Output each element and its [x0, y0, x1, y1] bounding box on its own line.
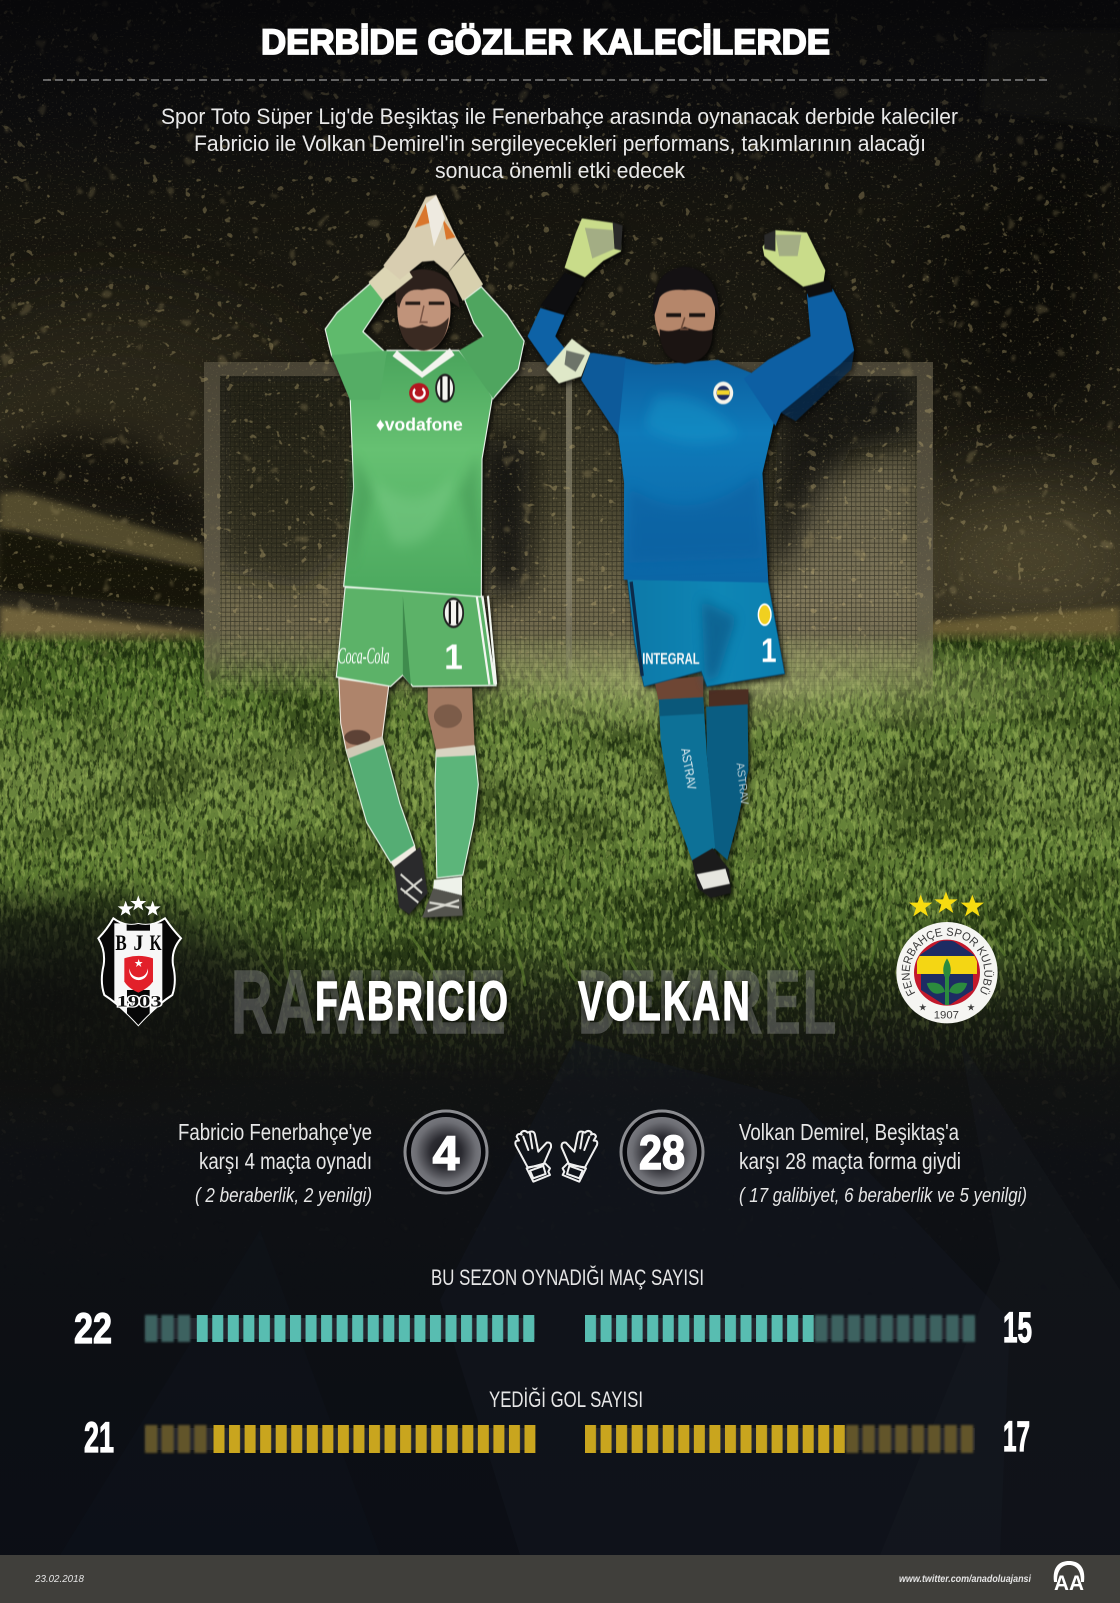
right arm: [744, 289, 854, 426]
red emblem: [124, 956, 153, 993]
goal frame: [204, 362, 933, 702]
crest on jersey: [713, 382, 733, 404]
boots: [394, 847, 428, 914]
stars: [909, 891, 984, 916]
text: Volkan derby record: Volkan Demirel, Beşiktaş'a: [739, 1119, 959, 1145]
value 21: 21: [84, 1414, 114, 1462]
heading: YEDİĞİ GOL SAYISI: [489, 1387, 643, 1412]
text: Fabricio derby record: [178, 1119, 372, 1207]
right cuff: [805, 280, 833, 298]
text: Fabricio derby record: ( 2 beraberlik, 2 yenilgi): [195, 1185, 372, 1207]
right stadium dust glow: [900, 100, 1120, 650]
icon: agency logo: [1054, 1561, 1084, 1595]
value 17: 17: [1003, 1413, 1030, 1461]
footer bar: [0, 1555, 1120, 1603]
ring lettering: FENERBAHÇE SPOR KULÜBÜ: [902, 928, 994, 996]
shield colours: [917, 937, 977, 1007]
crest: Fenerbahçe: 1907: [934, 1010, 959, 1022]
intro paragraph: sonuca önemli etki edecek: [435, 158, 686, 183]
head: [397, 270, 451, 351]
sponsor: vodafone: ♦vodafone: [376, 415, 463, 435]
icon: agency logo: AA: [1054, 1572, 1084, 1595]
player: Fabricio, green goalkeeper kit: [325, 195, 524, 918]
dashed divider: [43, 79, 1050, 81]
intro paragraph: Spor Toto Süper Lig'de Beşiktaş ile Fenerbahçe arasında oynanacak derbide kaleciler: [161, 104, 958, 129]
text: Volkan derby record: karşı 28 maçta forma giydi: [739, 1148, 961, 1174]
player: Volkan, blue goalkeeper kit: INTEGRAL: [642, 650, 700, 668]
crest: Beşiktaş: 1903: [117, 994, 162, 1011]
value 22: 22: [74, 1305, 112, 1353]
stars: [118, 895, 161, 916]
arms: [325, 283, 386, 388]
value 15: 15: [1003, 1304, 1032, 1352]
text: Volkan derby record: ( 17 galibiyet, 6 beraberlik ve 5 yenilgi): [739, 1185, 1027, 1207]
ghost surnames: DEMIREL: [578, 953, 838, 1053]
crest: Beşiktaş: J: [133, 930, 143, 955]
left upper arm: [528, 308, 570, 366]
left bar: [145, 1425, 536, 1453]
heading: BU SEZON OYNADIĞI MAÇ SAYISI: [431, 1265, 704, 1290]
text: Fabricio derby record: karşı 4 maçta oynadı: [199, 1148, 372, 1174]
shorts: [627, 579, 785, 686]
captain armband: [546, 339, 590, 383]
grass field: [0, 630, 1120, 1080]
player: Volkan, blue goalkeeper kit: 1: [761, 632, 777, 670]
crest: Fenerbahçe: [896, 892, 998, 1024]
gloves: [383, 195, 465, 280]
chart: goals conceded: [84, 1387, 1030, 1462]
text: Fabricio derby record: Fabricio Fenerbahçe'ye: [178, 1119, 372, 1145]
crest: Fenerbahçe: ★: [967, 1003, 975, 1013]
title: DERBİDE GÖZLER KALECİLERDE: [261, 23, 830, 62]
collar: [392, 348, 455, 378]
wrist wraps: [368, 254, 413, 301]
right bar: [585, 1425, 975, 1453]
left glove: [565, 218, 622, 277]
left forearm sleeve: [540, 273, 585, 315]
jersey: [581, 353, 775, 583]
legs: [339, 678, 389, 751]
player: Volkan, blue goalkeeper kit: ASTRAV: [734, 761, 752, 806]
stat circle: 28: [621, 1111, 703, 1193]
boot: [692, 848, 731, 898]
stat circle: 4: [405, 1111, 487, 1193]
left bar: [145, 1315, 535, 1342]
socks: [346, 737, 415, 862]
goal with net and frame, fading into the grass: [204, 362, 933, 702]
front leg: [654, 676, 703, 702]
intro paragraph: [161, 104, 958, 183]
shield: [98, 918, 181, 1025]
crest: Beşiktaş: B: [115, 930, 127, 955]
name: Volkan: VOLKAN: [578, 969, 752, 1032]
text: Volkan derby record: [739, 1119, 1027, 1207]
player: Fabricio, green goalkeeper kit: Coca-Cola: [338, 642, 390, 669]
icon: goalkeeper gloves: [515, 1131, 597, 1182]
shorts: [336, 587, 496, 686]
goal-line haze: [320, 631, 1120, 741]
name: Fabricio: FABRICIO: [315, 969, 510, 1032]
chart: matches played this season: [74, 1265, 1032, 1353]
stat circle: 4: 4: [433, 1128, 460, 1181]
ghost surnames: RAMIREZ: [231, 953, 507, 1053]
player: Volkan, blue goalkeeper kit: [528, 218, 854, 898]
player: Volkan, blue goalkeeper kit: ASTRAV: [678, 746, 698, 792]
head: [654, 268, 715, 355]
jersey: [344, 350, 493, 597]
stat circle: 28: 28: [639, 1127, 685, 1180]
background: night stadium, goal and grass: [0, 0, 1120, 1238]
left stadium stands: [0, 310, 300, 650]
crest: Beşiktaş: [98, 895, 181, 1027]
player: Fabricio, green goalkeeper kit: 1: [444, 638, 463, 677]
social link: www.twitter.com/anadoluajansi: [899, 1574, 1031, 1585]
leaf: [943, 958, 951, 1005]
right bar: [585, 1315, 975, 1342]
left lower dark falloff over grass: [0, 875, 350, 1125]
crest: Fenerbahçe: ★: [918, 1003, 927, 1013]
badge disc: [896, 922, 998, 1023]
intro paragraph: Fabricio ile Volkan Demirel'in sergileyecekleri performans, takımlarının alacağı: [194, 131, 926, 156]
second leg: [709, 689, 748, 708]
goal net: [220, 372, 917, 702]
date: 23.02.2018: [34, 1574, 84, 1585]
grass blades: [8, 840, 1110, 1000]
crest: Beşiktaş: K: [150, 930, 162, 955]
chest crests: [409, 383, 429, 403]
right glove: [762, 230, 825, 287]
